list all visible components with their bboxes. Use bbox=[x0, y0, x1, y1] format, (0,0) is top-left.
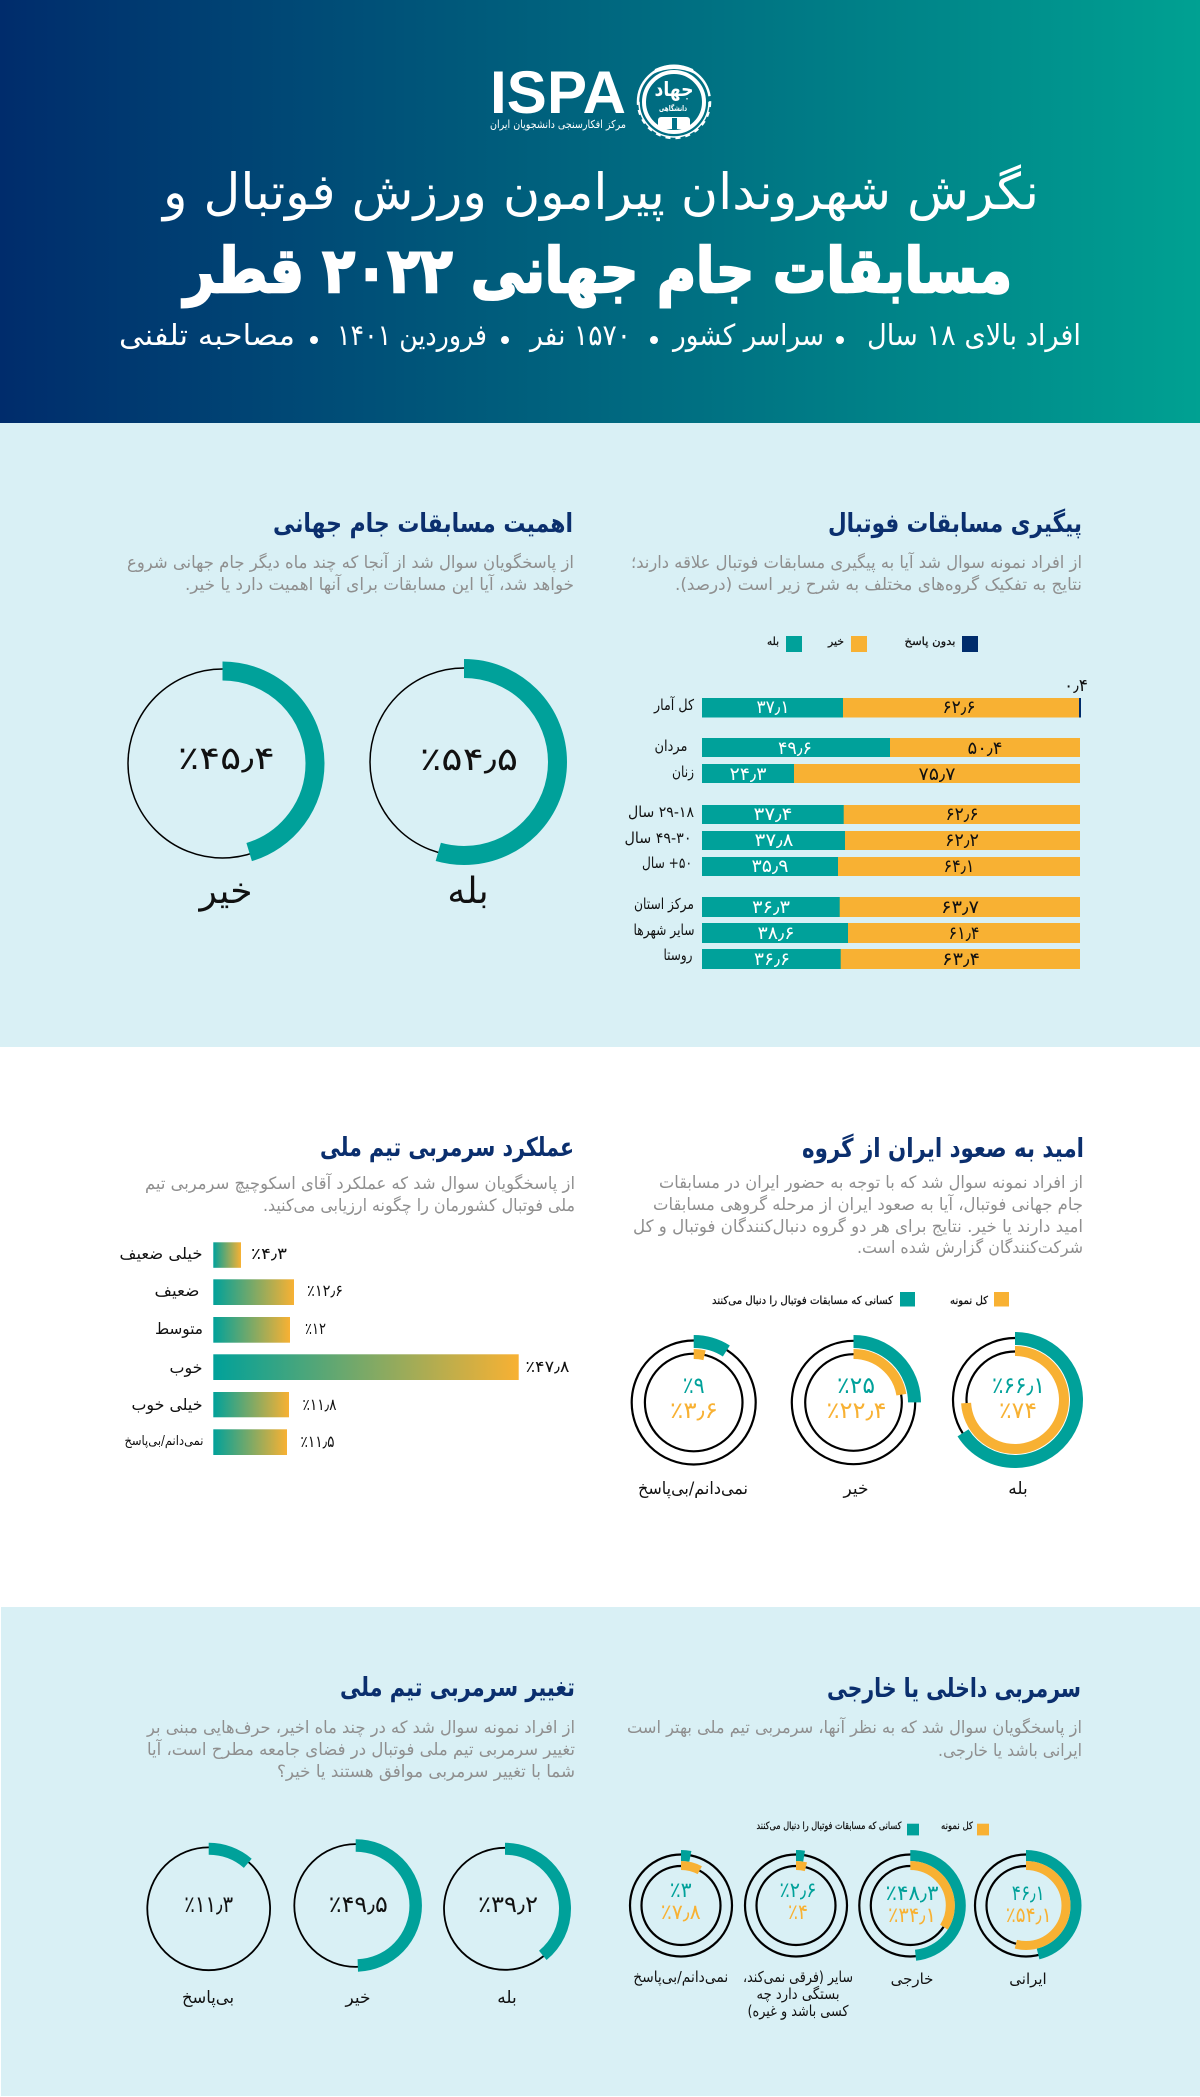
stacked bar chart: ۶۲٫۶ bbox=[946, 804, 978, 825]
stacked bar chart: ۲۴٫۳ bbox=[730, 764, 767, 785]
ring: no bbox=[128, 669, 317, 912]
bar chart: خیلی ضعیف bbox=[120, 1244, 202, 1263]
ring: other: ٪۴ bbox=[788, 1900, 808, 1924]
survey details: فروردین ۱۴۰۱ bbox=[337, 318, 487, 352]
ring: yes: بله bbox=[447, 871, 489, 912]
ring: yes bbox=[370, 668, 558, 912]
ring: foreign: خارجی bbox=[891, 1970, 933, 1988]
bar chart bbox=[120, 1242, 570, 1455]
description: از افراد نمونه سوال شد که در چند ماه اخیر، حرف‌هایی مبنی بر bbox=[146, 1718, 575, 1738]
logo: ISPA: مرکز افکارسنجی دانشجویان ایران bbox=[490, 118, 626, 131]
stacked bar chart: کل آمار bbox=[653, 696, 695, 714]
heading: سرمربی داخلی یا خارجی bbox=[827, 1674, 1081, 1704]
survey details: مصاحبه تلفنی bbox=[119, 318, 295, 352]
legend: کل نمونه bbox=[941, 1821, 973, 1832]
description: ایرانی باشد یا خارجی. bbox=[938, 1741, 1082, 1761]
panel: importance of the World Cup bbox=[127, 509, 574, 912]
ring: other: سایر (فرقی نمی‌کند، bbox=[743, 1968, 853, 1986]
ring: yes: ٪۳۹٫۲ bbox=[478, 1892, 538, 1918]
logo: Jahad emblem: جهاد bbox=[654, 77, 694, 101]
heading: پیگیری مسابقات فوتبال bbox=[828, 508, 1082, 539]
ring: don't know: ٪۷٫۸ bbox=[661, 1900, 701, 1924]
stacked bar chart: ۳۷٫۸ bbox=[754, 830, 794, 851]
stacked bar chart: +۵۰ سال bbox=[642, 854, 692, 872]
ring: other: بستگی دارد چه bbox=[756, 1985, 840, 2003]
stacked bar chart: ۶۱٫۴ bbox=[948, 923, 980, 944]
section backgrounds bbox=[0, 423, 1200, 2096]
description: خواهد شد، آیا این مسابقات برای آنها اهمیت دارد یا خیر. bbox=[185, 573, 574, 595]
stacked bar chart: مرکز استان bbox=[634, 895, 694, 913]
logo: Jahad emblem: دانشگاهی bbox=[659, 103, 687, 113]
ring: yes: ٪۷۴ bbox=[999, 1398, 1037, 1424]
bar chart: نمی‌دانم/بی‌پاسخ bbox=[124, 1434, 204, 1449]
ring: no answer: بی‌پاسخ bbox=[182, 1988, 234, 2008]
survey details: سراسر کشور bbox=[671, 318, 824, 352]
ring: Iranian: ٪۵۴٫۱ bbox=[1006, 1903, 1052, 1927]
stacked bar chart: سایر شهرها bbox=[634, 921, 694, 939]
stacked bar chart: ۳۶٫۶ bbox=[754, 949, 790, 970]
legend: کسانی که مسابقات فوتبال را دنبال می‌کنند bbox=[712, 1294, 894, 1307]
logo: ISPA: ISPA bbox=[490, 59, 626, 126]
description: شما با تغییر سرمربی موافق هستند یا خیر؟ bbox=[277, 1762, 575, 1782]
ring: yes bbox=[444, 1848, 566, 2008]
ring: Iranian: ایرانی bbox=[1009, 1970, 1047, 1988]
stacked bar chart: ۷۵٫۷ bbox=[918, 764, 956, 785]
bar chart: متوسط bbox=[155, 1319, 203, 1339]
ring: no: ٪۴۵٫۴ bbox=[178, 739, 275, 777]
logo: Jahad emblem bbox=[638, 64, 710, 138]
legend: کسانی که مسابقات فوتبال را دنبال می‌کنند bbox=[756, 1821, 902, 1832]
ring: don't know bbox=[632, 1340, 756, 1499]
stacked bar chart: ۵۰٫۴ bbox=[968, 738, 1002, 759]
panel: coach performance bbox=[120, 1133, 575, 1455]
description bbox=[145, 1172, 575, 1216]
panel: hope of advancing from the group bbox=[632, 1133, 1084, 1499]
ring: don't know: ٪۳ bbox=[670, 1878, 692, 1902]
ring: Iranian bbox=[975, 1854, 1077, 1988]
description: از پاسخگویان سوال شد که عملکرد آقای اسکوچیچ سرمربی تیم bbox=[145, 1172, 575, 1194]
stacked bar chart: ۳۸٫۶ bbox=[758, 923, 794, 944]
stacked bar chart bbox=[624, 676, 1088, 970]
ring: no: ٪۴۹٫۵ bbox=[329, 1892, 388, 1918]
ring: foreign: ٪۳۴٫۱ bbox=[888, 1903, 936, 1927]
stacked bar chart: ۳۷٫۱ bbox=[756, 697, 790, 718]
ring: no bbox=[294, 1844, 417, 2008]
panel: changing the national coach bbox=[146, 1673, 575, 2008]
ring: no bbox=[792, 1341, 915, 1499]
heading: امید به صعود ایران از گروه bbox=[802, 1133, 1084, 1164]
bar chart: خیلی خوب bbox=[132, 1395, 202, 1415]
heading: اهمیت مسابقات جام جهانی bbox=[273, 509, 573, 539]
ring: no: خیر bbox=[198, 871, 252, 912]
stacked bar chart: مردان bbox=[654, 737, 688, 755]
ring: don't know: نمی‌دانم/بی‌پاسخ bbox=[638, 1479, 748, 1499]
stacked bar chart: ۳۷٫۴ bbox=[754, 804, 792, 825]
bar chart: ٪۴۷٫۸ bbox=[526, 1357, 570, 1376]
bar chart: ٪۱۲ bbox=[305, 1319, 326, 1338]
survey details: افراد بالای ۱۸ سال bbox=[867, 318, 1081, 352]
ring: don't know: ٪۹ bbox=[683, 1373, 705, 1399]
ring: no answer bbox=[147, 1847, 270, 2008]
heading: عملکرد سرمربی تیم ملی bbox=[320, 1133, 574, 1163]
stacked bar chart: ۲۹-۱۸ سال bbox=[628, 803, 694, 821]
ring: no: ٪۲۲٫۴ bbox=[826, 1398, 886, 1424]
heading: تغییر سرمربی تیم ملی bbox=[340, 1673, 575, 1703]
legend: بله bbox=[767, 635, 779, 648]
ring: other: کسی باشد و غیره) bbox=[748, 2002, 849, 2020]
header banner bbox=[0, 0, 1200, 423]
description: از افراد نمونه سوال شد که با توجه به حضور ایران در مسابقات bbox=[659, 1173, 1083, 1193]
ring: foreign: ٪۴۸٫۳ bbox=[886, 1881, 938, 1905]
description: شرکت‌کنندگان گزارش شده است. bbox=[857, 1237, 1083, 1258]
ring: yes: بله bbox=[1008, 1479, 1028, 1499]
bar chart: ضعیف bbox=[154, 1281, 200, 1300]
description: از پاسخگویان سوال شد که به نظر آنها، سرمربی تیم ملی بهتر است bbox=[627, 1716, 1082, 1738]
description bbox=[627, 1716, 1082, 1761]
stacked bar chart: روستا bbox=[664, 946, 692, 964]
bar chart: ٪۱۱٫۸ bbox=[302, 1395, 337, 1414]
description: جام جهانی فوتبال، آیا به صعود ایران از مرحله گروهی مسابقات bbox=[653, 1193, 1083, 1215]
legend bbox=[756, 1821, 989, 1835]
stacked bar chart: ۳۵٫۹ bbox=[752, 856, 788, 877]
stacked bar chart: ۳۶٫۳ bbox=[752, 897, 790, 918]
stacked bar chart: ۶۲٫۲ bbox=[945, 830, 979, 851]
legend bbox=[712, 1292, 1009, 1307]
title line 1: نگرش شهروندان پیرامون ورزش فوتبال و bbox=[160, 163, 1039, 222]
stacked bar chart: ۶۴٫۱ bbox=[944, 856, 974, 877]
legend bbox=[767, 635, 978, 652]
ring: Iranian: ۴۶٫۱ bbox=[1012, 1881, 1045, 1905]
survey details: ۱۵۷۰ نفر bbox=[528, 318, 631, 352]
ring: no answer: ٪۱۱٫۳ bbox=[184, 1892, 233, 1918]
description bbox=[631, 551, 1082, 595]
legend: بدون پاسخ bbox=[904, 635, 956, 648]
bar chart: ٪۱۲٫۶ bbox=[307, 1281, 343, 1300]
ring: yes: ٪۶۶٫۱ bbox=[992, 1373, 1045, 1399]
ring: no: خیر bbox=[842, 1479, 869, 1499]
description: نتایج به تفکیک گروه‌های مختلف به شرح زیر است (درصد). bbox=[675, 574, 1082, 595]
ring: foreign bbox=[859, 1854, 961, 1988]
ring: yes: ٪۵۴٫۵ bbox=[420, 740, 518, 778]
survey details bbox=[119, 318, 1081, 352]
ring: don't know: نمی‌دانم/بی‌پاسخ bbox=[633, 1968, 728, 1987]
ring: yes bbox=[953, 1338, 1077, 1499]
ring: other: ٪۲٫۶ bbox=[780, 1878, 816, 1902]
description: از افراد نمونه سوال شد آیا به پیگیری مسابقات فوتبال علاقه دارند؛ bbox=[631, 551, 1082, 573]
title line 2: مسابقات جام جهانی ۲۰۲۲ قطر bbox=[181, 234, 1012, 308]
legend: کل نمونه bbox=[950, 1294, 989, 1307]
panel: following football bbox=[624, 508, 1088, 970]
description: ملی فوتبال کشورمان را چگونه ارزیابی می‌کنید. bbox=[263, 1195, 575, 1216]
description: تغییر سرمربی تیم ملی فوتبال در فضای جامعه مطرح است، آیا bbox=[147, 1738, 575, 1760]
stacked bar chart: ۶۲٫۶ bbox=[942, 697, 976, 718]
description bbox=[127, 551, 574, 595]
ring: yes: بله bbox=[497, 1988, 517, 2008]
ring: don't know bbox=[630, 1854, 732, 1987]
stacked bar chart: ۴۹-۳۰ سال bbox=[624, 829, 692, 847]
description: امید دارند یا خیر. نتایج برای هر دو گروه دنبال‌کنندگان فوتبال و کل bbox=[633, 1216, 1083, 1237]
stacked bar chart: ۴۹٫۶ bbox=[778, 738, 812, 759]
bar chart: ٪۴٫۳ bbox=[251, 1244, 287, 1263]
stacked bar chart: ۰٫۴ bbox=[1064, 676, 1088, 696]
description: از پاسخگویان سوال شد از آنجا که چند ماه دیگر جام جهانی شروع bbox=[127, 551, 574, 573]
panel: domestic or foreign coach bbox=[627, 1674, 1082, 2020]
ring: don't know: ٪۳٫۶ bbox=[670, 1398, 718, 1424]
ring: no: خیر bbox=[344, 1988, 371, 2008]
legend: خیر bbox=[827, 635, 844, 648]
description bbox=[633, 1173, 1083, 1258]
ring: no: ٪۲۵ bbox=[837, 1373, 875, 1399]
description bbox=[146, 1718, 575, 1782]
ring: other bbox=[743, 1854, 853, 2020]
stacked bar chart: زنان bbox=[672, 763, 694, 781]
stacked bar chart: ۶۳٫۷ bbox=[941, 897, 979, 918]
stacked bar chart: ۶۳٫۴ bbox=[942, 949, 980, 970]
bar chart: خوب bbox=[170, 1358, 202, 1378]
bar chart: ٪۱۱٫۵ bbox=[300, 1432, 334, 1451]
